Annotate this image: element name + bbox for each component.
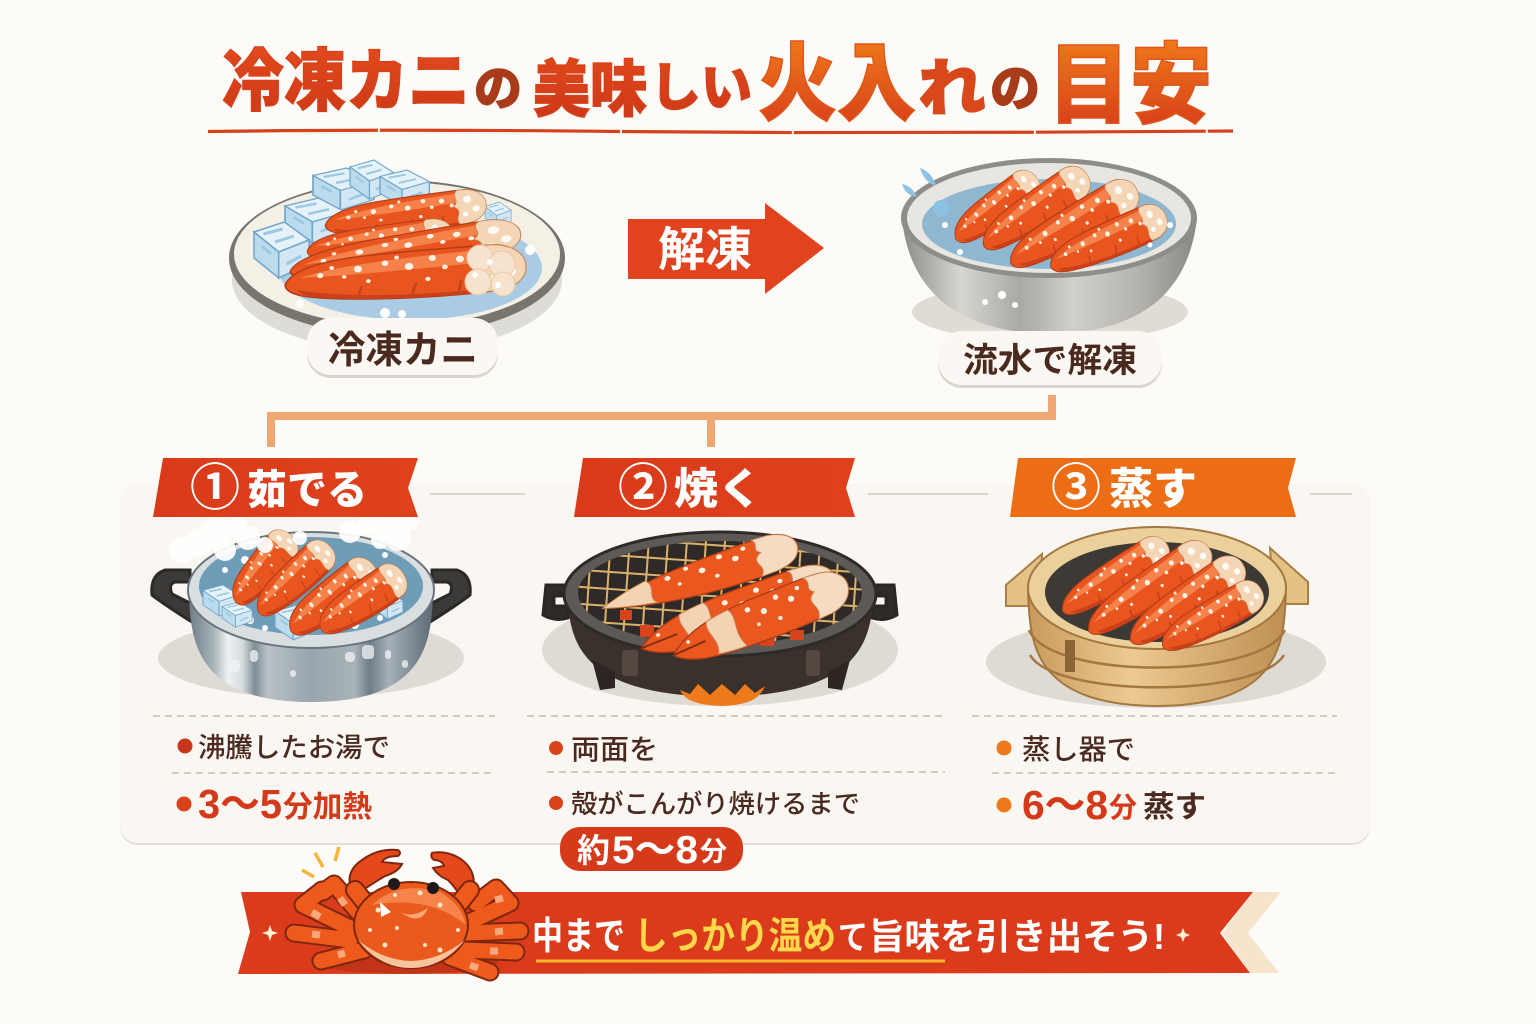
leg shadow	[310, 946, 500, 974]
text: steam instructions: 蒸す	[1143, 791, 1206, 824]
text: steam instructions	[972, 716, 1337, 828]
grill illustration	[542, 528, 898, 706]
banner	[238, 892, 1281, 974]
title: 目安	[1048, 36, 1212, 135]
text: grill instructions: 両面を	[571, 734, 658, 765]
illustration: bowl under running water	[901, 158, 1197, 342]
text: boil instructions: 3〜5	[198, 781, 282, 827]
time pill: about 5 to 8 minutes: 約	[577, 832, 610, 869]
illustration: frozen crab on plate	[229, 160, 565, 352]
ribbon heading: grill: ②	[618, 460, 668, 516]
ribbon heading: grill: 焼く	[674, 466, 762, 514]
method 1: boil	[152, 458, 495, 827]
text: boil instructions	[153, 716, 495, 827]
text: grill instructions	[527, 716, 947, 819]
text: boil instructions: 分加熱	[283, 791, 372, 824]
time pill: about 5 to 8 minutes: 5〜8	[612, 829, 698, 872]
banner message	[532, 916, 1165, 958]
title: しい	[650, 60, 752, 118]
text: grill instructions: 殻がこんがり焼けるまで	[571, 789, 860, 819]
banner message: しっかり温め	[634, 916, 836, 958]
text: steam instructions: 6〜8	[1022, 782, 1108, 828]
arm joints	[355, 890, 470, 905]
banner message: て	[838, 919, 868, 957]
ribbon heading: boil: ①	[190, 460, 240, 516]
steam	[169, 504, 419, 563]
eyes	[388, 878, 400, 890]
ribbon heading: steam: ③	[1051, 460, 1101, 516]
banner message: 中まで	[532, 916, 625, 958]
steamer illustration	[986, 527, 1326, 708]
title	[222, 36, 1212, 135]
time pill: about 5 to 8 minutes	[560, 827, 743, 872]
title: の	[474, 63, 522, 116]
ribbon heading: boil: 茹でる	[247, 467, 367, 513]
legs	[294, 884, 520, 972]
shell	[354, 882, 468, 968]
flame	[680, 684, 765, 706]
arrow: thaw	[628, 203, 824, 294]
label: frozen crab: 冷凍カニ	[328, 330, 478, 372]
label: thaw in running water	[938, 331, 1162, 388]
time pill: about 5 to 8 minutes: 分	[700, 837, 727, 867]
ribbon heading: steam: 蒸す	[1109, 466, 1197, 514]
text: steam instructions: 蒸し器で	[1022, 734, 1135, 765]
title: の	[990, 61, 1040, 117]
ribbon heading: boil	[153, 458, 418, 517]
title: 冷凍カニ	[222, 44, 470, 120]
mascot crab	[294, 847, 520, 974]
sparkle lines	[302, 847, 339, 877]
header rules	[430, 493, 1352, 495]
panel: cooking methods	[120, 484, 1370, 845]
arrow: thaw: 解凍	[658, 223, 752, 276]
method 3: steam	[972, 458, 1337, 828]
label: thaw in running water: 流水で解凍	[963, 342, 1137, 380]
title: 美味	[533, 56, 647, 125]
text: boil instructions: 沸騰したお湯で	[198, 733, 390, 763]
method 2: grill	[527, 458, 947, 872]
connector lines	[271, 395, 1052, 447]
claws	[350, 850, 474, 896]
ribbon heading: grill	[574, 458, 855, 517]
title: れ	[918, 55, 986, 124]
text: steam instructions: 分	[1109, 792, 1137, 823]
banner message: 旨味を引き出そう!	[869, 916, 1165, 957]
label: frozen crab	[307, 318, 498, 378]
ribbon heading: steam	[1010, 458, 1296, 517]
title underline	[208, 130, 1233, 133]
pot illustration	[152, 524, 470, 702]
title: 火入	[758, 36, 916, 132]
banner sparkle	[262, 925, 1190, 942]
